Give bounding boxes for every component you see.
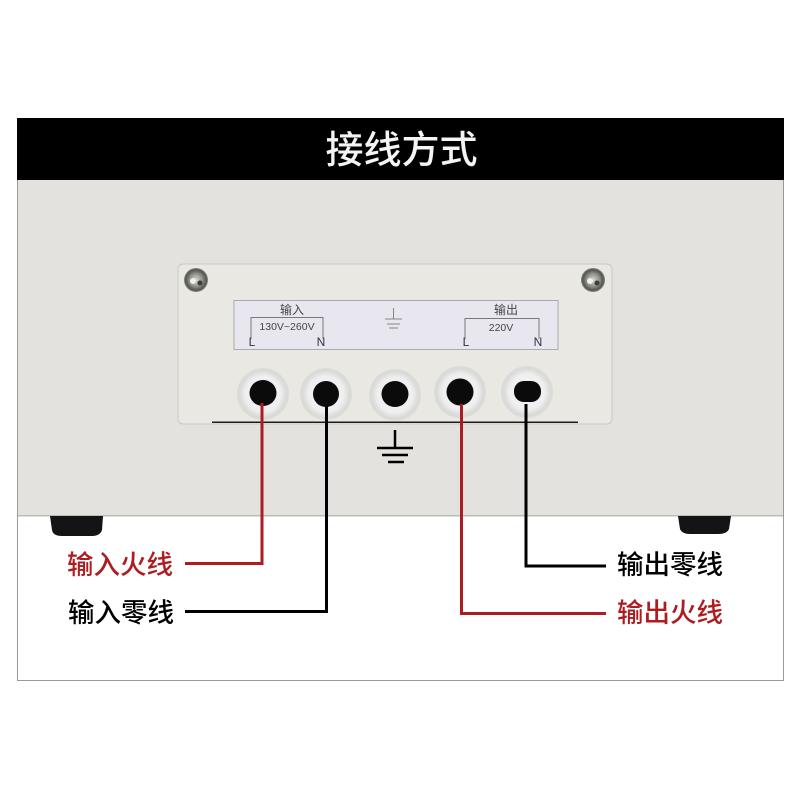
terminal hole 4 xyxy=(434,366,486,418)
terminal hole 1 xyxy=(237,368,289,420)
output label: 输出 xyxy=(494,302,518,317)
label: output live: 输出火线 xyxy=(617,598,723,628)
title: 接线方式 xyxy=(325,130,478,172)
foot: left xyxy=(50,516,103,536)
label: input neutral: 输入零线 xyxy=(68,598,174,628)
terminal hole 2 xyxy=(300,368,352,420)
foot: right xyxy=(678,516,731,534)
input label: 输入 xyxy=(280,302,304,317)
wire: input neutral xyxy=(185,406,326,612)
title bar xyxy=(17,118,784,180)
terminal hole 5 xyxy=(501,366,553,418)
output label: N xyxy=(534,335,542,349)
outer frame xyxy=(18,118,784,680)
wire: input live xyxy=(185,403,262,564)
wire: output live xyxy=(462,404,606,614)
device body xyxy=(18,180,783,516)
label: input live: 输入火线 xyxy=(67,550,173,580)
output label xyxy=(463,302,542,349)
label: output neutral: 输出零线 xyxy=(617,550,723,580)
screw: left xyxy=(184,268,208,292)
ground symbol xyxy=(377,430,413,462)
input label: L xyxy=(249,335,256,349)
wire: output neutral xyxy=(526,404,606,566)
input label: N xyxy=(317,335,325,349)
screw: right xyxy=(581,268,605,292)
output label: L xyxy=(463,335,470,349)
input label: 130V~260V xyxy=(259,321,315,333)
terminal panel xyxy=(178,264,612,424)
terminal hole 3 xyxy=(369,369,421,421)
label plate xyxy=(234,300,558,350)
output label: 220V xyxy=(489,322,513,334)
input label xyxy=(249,302,325,349)
printed ground symbol xyxy=(385,308,402,328)
